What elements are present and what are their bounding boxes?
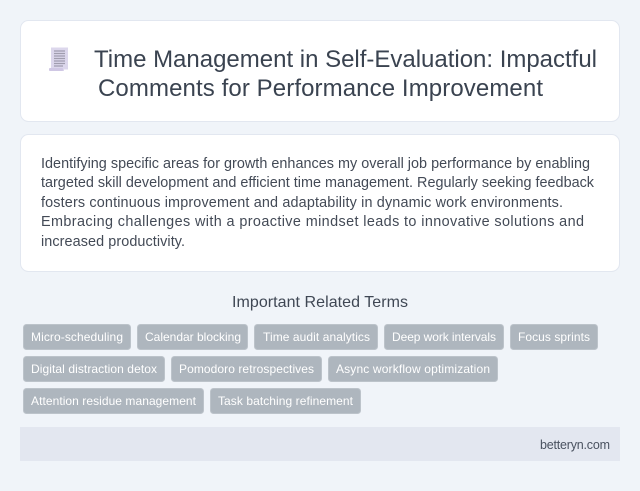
tag: Deep work intervals: Deep work intervals (392, 330, 496, 344)
tag: Pomodoro retrospectives (172, 356, 322, 382)
tag: Micro-scheduling: Micro-scheduling (31, 330, 123, 344)
tag: Calendar blocking (138, 324, 248, 350)
tag: Attention residue management: Attention residue management (31, 394, 197, 408)
description text: fosters continuous improvement and adaptability in dynamic work environments. (41, 195, 563, 211)
tag group (24, 324, 598, 414)
tag: Attention residue management (24, 388, 204, 414)
description text (41, 156, 595, 250)
tag: Task batching refinement: Task batching refinement (218, 394, 354, 408)
tag: Focus sprints (510, 324, 598, 350)
tag: Micro-scheduling (24, 324, 130, 350)
tag: Digital distraction detox (24, 356, 164, 382)
description text: increased productivity. (41, 234, 185, 250)
footer bar (20, 427, 620, 461)
tag: Focus sprints: Focus sprints (518, 330, 590, 344)
tag: Calendar blocking: Calendar blocking (145, 330, 241, 344)
title: Comments for Performance Improvement (98, 75, 543, 102)
tag: Pomodoro retrospectives: Pomodoro retrospectives (179, 362, 314, 376)
panel: description card (20, 134, 620, 272)
tag: Time audit analytics: Time audit analytics (263, 330, 370, 344)
panel: title card (20, 20, 620, 122)
footer brand: betteryn.com (540, 438, 610, 452)
description text: Identifying specific areas for growth enhances my overall job performance by enabling (41, 156, 590, 172)
tag: Task batching refinement (210, 388, 360, 414)
title (94, 46, 597, 102)
tag: Async workflow optimization: Async workflow optimization (336, 362, 490, 376)
tag: Deep work intervals (384, 324, 504, 350)
icon: document scroll (49, 48, 68, 71)
description text: Embracing challenges with a proactive mindset leads to innovative solutions and (41, 214, 584, 230)
tag: Async workflow optimization (328, 356, 498, 382)
heading: important related terms: Important Related Terms (232, 294, 408, 311)
tag: Digital distraction detox: Digital distraction detox (31, 362, 157, 376)
title: Time Management in Self-Evaluation: Impactful (94, 46, 597, 73)
description text: targeted skill development and efficient time management. Regularly seeking feedback (41, 175, 595, 191)
tag: Time audit analytics (254, 324, 378, 350)
